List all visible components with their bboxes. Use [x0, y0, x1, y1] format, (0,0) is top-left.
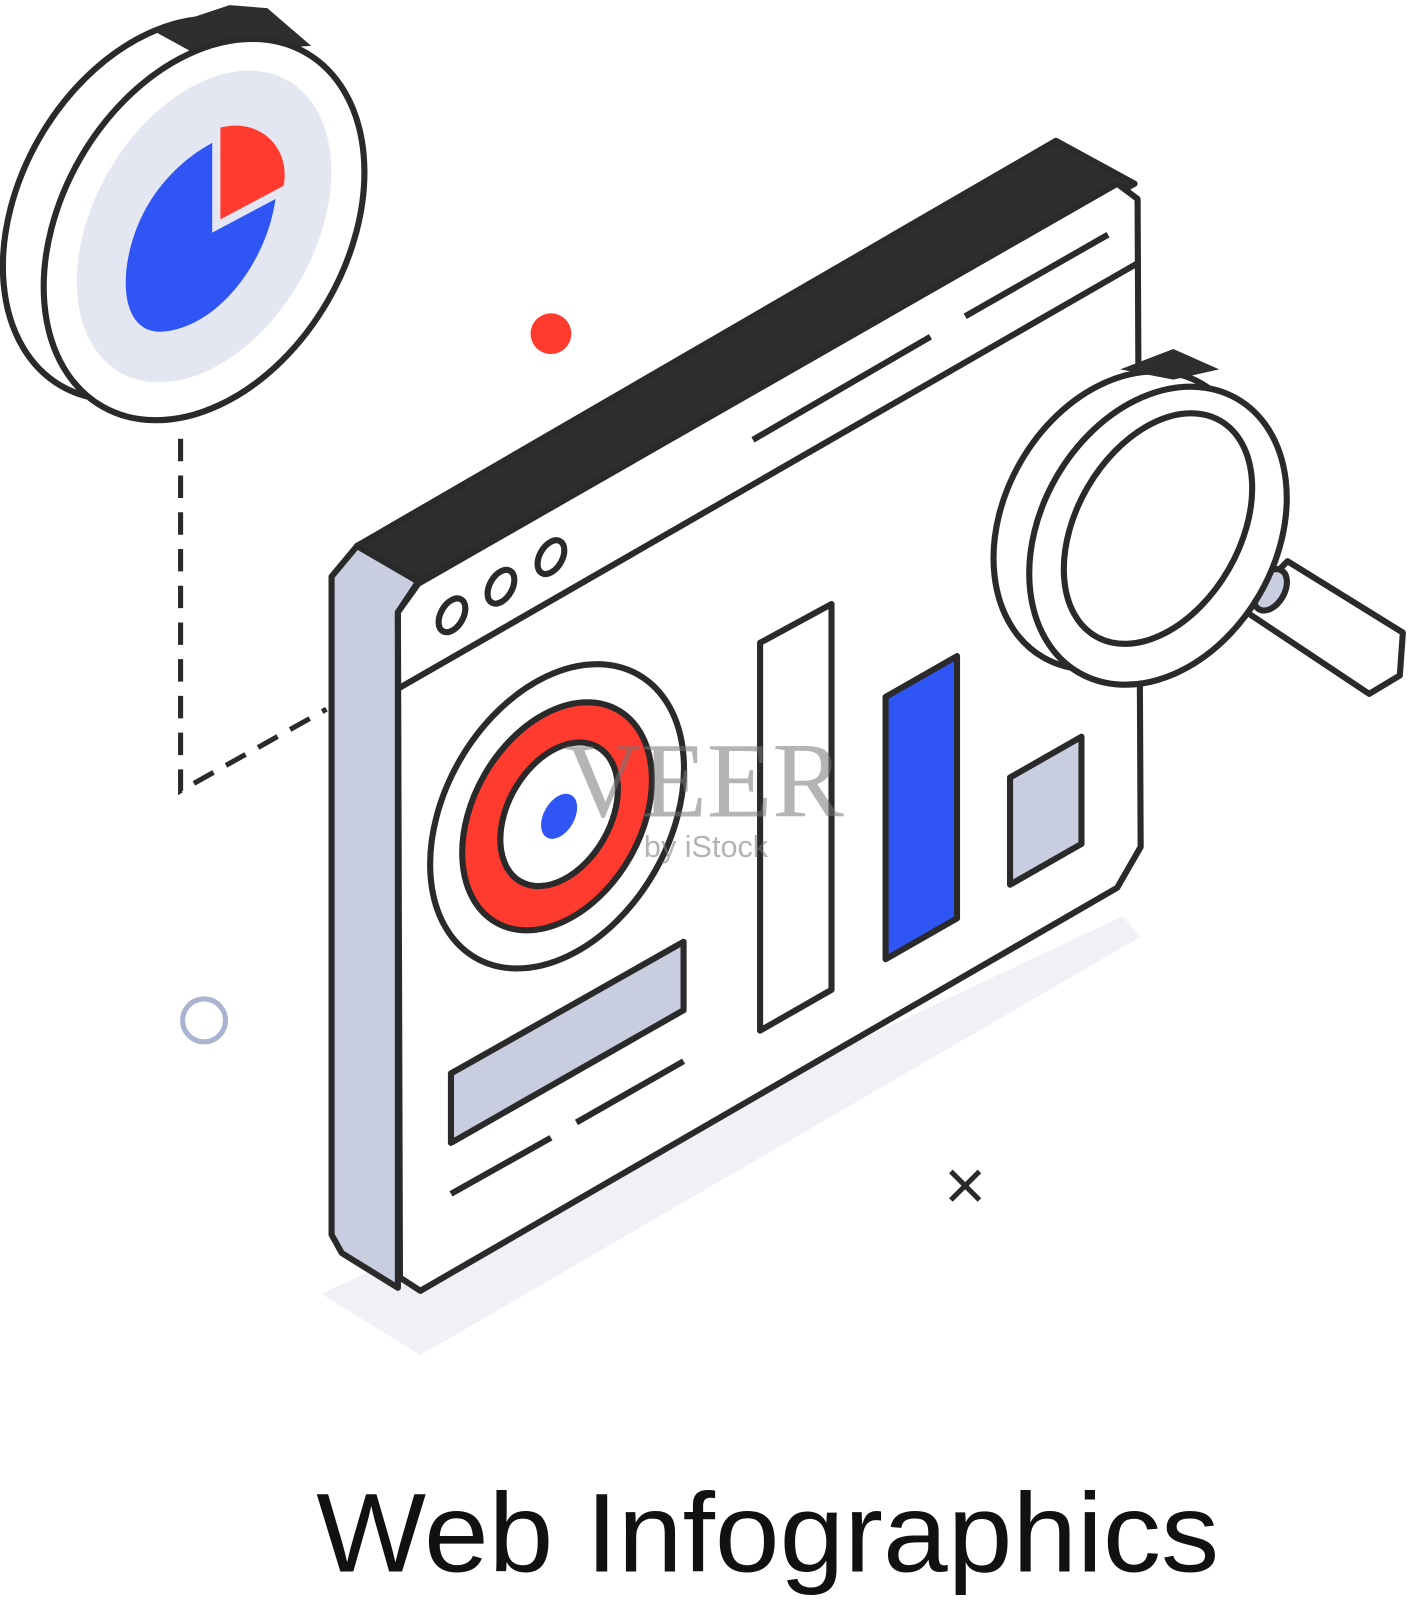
donut chart	[378, 619, 736, 1014]
browser window	[332, 141, 1141, 1291]
bar chart	[760, 604, 1081, 1031]
grey ring	[183, 999, 225, 1042]
red dot	[531, 313, 571, 354]
icon: pie chart coin	[0, 0, 430, 478]
icon: magnifier	[942, 325, 1403, 731]
watermark: VEER	[564, 722, 844, 840]
title: Web Infographics	[316, 1469, 1219, 1595]
dashed connector	[181, 439, 326, 791]
text block	[451, 942, 684, 1194]
cross mark	[951, 1171, 979, 1200]
floor shadow	[321, 916, 1141, 1355]
watermark: by iStock	[644, 830, 769, 864]
